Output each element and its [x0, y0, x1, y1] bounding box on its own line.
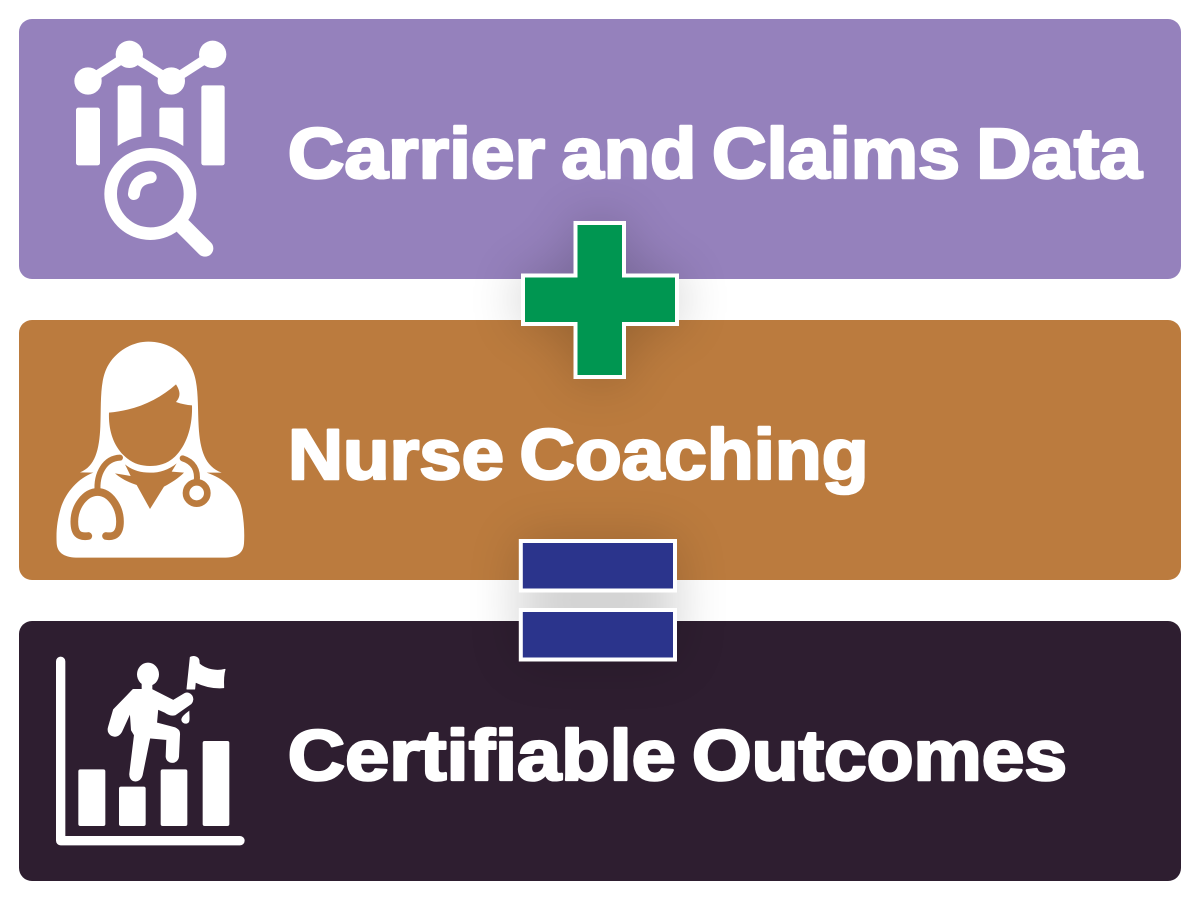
heading: carrier and claims data	[288, 115, 1142, 194]
heading: carrier and claims data: Claims	[712, 115, 960, 194]
equals sign	[519, 539, 677, 661]
panel: nurse coaching	[19, 320, 1181, 580]
heading: certifiable outcomes	[288, 717, 1067, 796]
plus sign	[521, 221, 679, 379]
icon: person climbing bar chart with flag	[61, 657, 240, 841]
heading: certifiable outcomes: Outcomes	[692, 717, 1067, 796]
icon: chart with magnifier	[74, 41, 226, 248]
heading: carrier and claims data: Carrier	[288, 115, 545, 194]
heading: carrier and claims data: Data	[976, 115, 1142, 194]
panel: certifiable outcomes	[19, 621, 1181, 881]
icon: nurse with stethoscope	[56, 342, 244, 558]
heading: nurse coaching: Nurse	[288, 416, 504, 495]
heading: nurse coaching: Coaching	[520, 416, 868, 495]
heading: carrier and claims data: and	[562, 115, 696, 194]
heading: certifiable outcomes: Certifiable	[288, 717, 676, 796]
panel: carrier and claims data	[19, 19, 1181, 279]
heading: nurse coaching	[288, 416, 868, 495]
